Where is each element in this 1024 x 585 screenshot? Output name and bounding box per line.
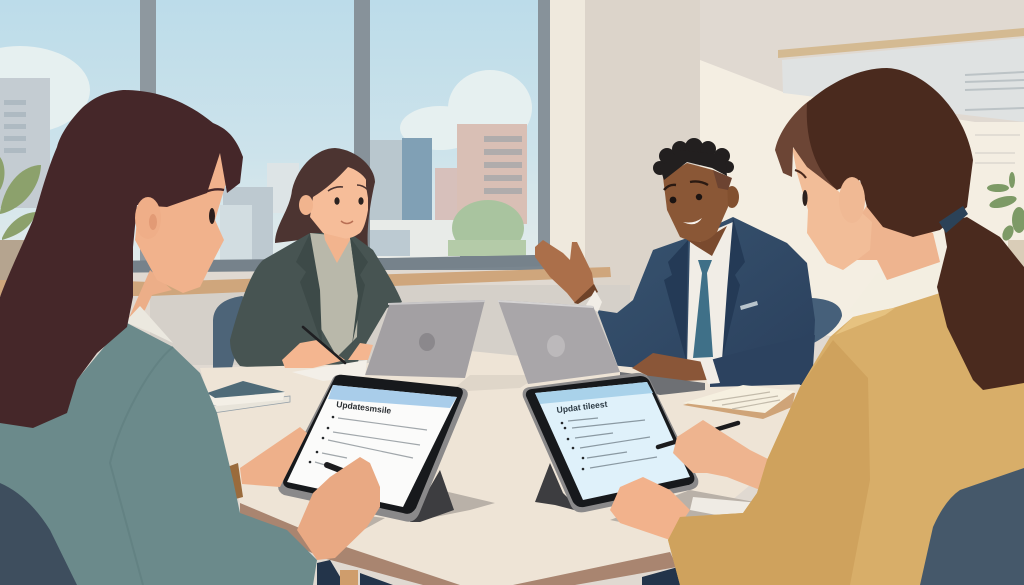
- curly hair: [653, 138, 734, 180]
- person: woman foreground right: [668, 68, 1024, 585]
- gesture hand: [535, 240, 597, 303]
- hand right lower: [610, 477, 690, 540]
- person: man at back: [535, 138, 815, 385]
- collar: [125, 306, 173, 343]
- man's lower sleeve and hand: [632, 335, 815, 387]
- hair: [807, 68, 973, 237]
- collar: [847, 260, 940, 313]
- paper under writing hand: [292, 360, 367, 381]
- sweater: [668, 293, 1024, 585]
- face: [135, 153, 227, 293]
- city buildings: [0, 78, 527, 262]
- tablet left heading: Updatesmsile: [336, 399, 392, 416]
- left hand holding tablet: [240, 427, 307, 487]
- table edge: [240, 503, 677, 585]
- fringe: [775, 100, 837, 190]
- tablet left: [278, 375, 468, 522]
- chair right back: [812, 298, 842, 344]
- shadow between tablets: [450, 375, 540, 392]
- hand right writing: [673, 420, 770, 490]
- notepad right: [683, 385, 795, 419]
- window mullions: [140, 0, 156, 265]
- clouds: [0, 46, 532, 150]
- hair tie: [939, 206, 968, 233]
- hair: [0, 90, 243, 428]
- ear: [135, 197, 161, 239]
- ear: [839, 177, 865, 223]
- face: [792, 147, 872, 270]
- books: [207, 381, 290, 413]
- table: [200, 351, 800, 585]
- plant left: [0, 157, 41, 280]
- person: woman foreground left: [0, 90, 317, 585]
- plant right: [987, 172, 1024, 280]
- ponytail: [937, 217, 1024, 390]
- tablet right: [523, 373, 698, 512]
- person: woman at back: [230, 148, 402, 372]
- wall noticeboard: [778, 28, 1024, 163]
- stylus left: [327, 465, 345, 472]
- tablet right heading: Updat tileest: [556, 399, 608, 415]
- trousers below table: [317, 560, 690, 585]
- neck: [128, 270, 172, 320]
- laptop right: [498, 300, 705, 395]
- laptop left: [365, 300, 485, 378]
- paper right: [690, 497, 760, 520]
- hand left: [297, 457, 380, 560]
- chair foreground right: [920, 468, 1024, 585]
- back woman's hands: [282, 327, 373, 368]
- tablet shadows: [318, 490, 760, 545]
- window: [0, 0, 550, 274]
- window sill: [0, 267, 611, 296]
- chair foreground left: [0, 483, 77, 585]
- neck: [845, 205, 940, 280]
- chair left back: [213, 296, 250, 368]
- stylus right: [658, 423, 738, 447]
- shirt: [0, 322, 317, 585]
